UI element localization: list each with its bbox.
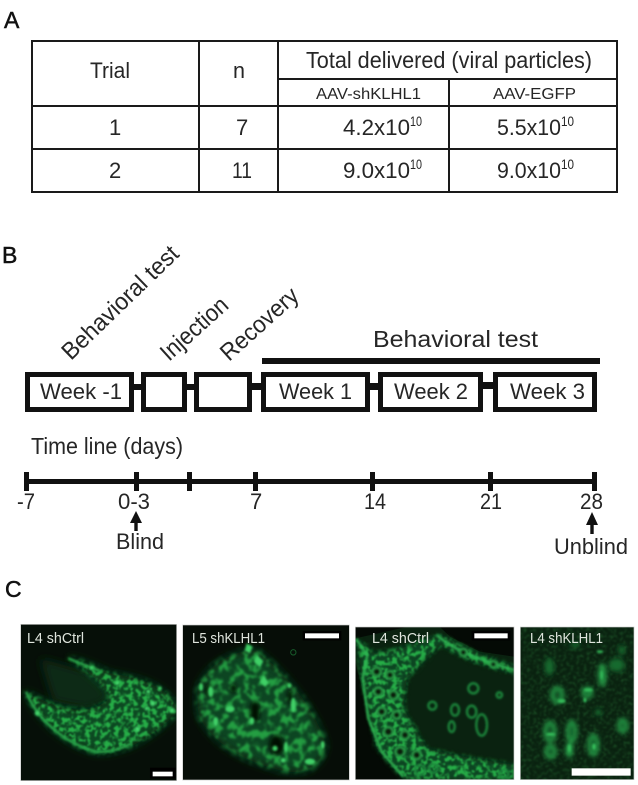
bright outer edge: [356, 635, 514, 777]
stained tissue texture: [197, 650, 325, 772]
week labels: Week 2: [394, 379, 468, 404]
image label: L4 shCtrl: L4 shCtrl: [372, 630, 429, 647]
week boxes: [28, 374, 594, 410]
timeline: [17, 433, 628, 559]
panel label B: B: [2, 242, 17, 268]
image label: L4 shCtrl: L4 shCtrl: [27, 630, 84, 647]
timeline title: Time line (days): [31, 433, 183, 459]
behavioral test span bar: [262, 358, 600, 364]
faint wedge glow: [40, 658, 110, 708]
table header: n: n: [233, 58, 245, 83]
background texture: [520, 627, 634, 780]
timeline day labels: 14: [364, 489, 386, 514]
interior cell rings: [415, 683, 508, 778]
table row: trial 2: 10: [561, 156, 574, 172]
micrograph: L4 shCtrl, low magnification: [21, 624, 177, 781]
timeline day labels: 21: [480, 489, 502, 514]
table grid: [32, 41, 617, 192]
unblind label: Unblind: [554, 534, 628, 559]
micrograph: L4 shKLHL1: [520, 627, 634, 780]
band cell rings: [372, 649, 497, 759]
bright cell rings: [545, 665, 627, 758]
table row: trial 2: 9.0x10: [343, 158, 410, 183]
week labels: Week 3: [510, 379, 585, 404]
bright edge: [26, 658, 132, 752]
image label: L4 shKLHL1: L4 shKLHL1: [530, 630, 603, 647]
bright highlights: [546, 650, 603, 752]
table header: Trial: Trial: [90, 58, 130, 83]
table row: trial 1: 1: [109, 115, 121, 140]
timeline day labels: [17, 489, 603, 514]
scale bar: [303, 631, 341, 640]
arrow: blind: [130, 511, 142, 531]
stained cell texture: [357, 635, 514, 780]
stained tissue glow: [197, 650, 325, 772]
table header: AAV-shKLHL1: AAV-shKLHL1: [316, 86, 421, 103]
dim cell clusters: [545, 642, 625, 715]
micrograph: L5 shKLHL1: [183, 625, 349, 780]
panel label C: C: [5, 576, 22, 602]
bright cells: [35, 666, 175, 732]
rotated label: recovery: Recovery: [215, 282, 304, 366]
table row: trial 2: 2: [109, 158, 121, 183]
rotated label: injection: Injection: [155, 292, 234, 366]
bright cells: [199, 643, 325, 765]
rotated label: behavioral test: Behavioral test: [56, 240, 185, 365]
table row: trial 1: [109, 113, 574, 140]
table header: AAV-EGFP: AAV-EGFP: [493, 86, 576, 103]
table row: trial 1: 7: [236, 115, 248, 140]
timeline day labels: 7: [250, 489, 262, 514]
blind label: Blind: [116, 529, 164, 554]
scale bar: [150, 768, 176, 779]
study schedule diagram: [28, 240, 600, 410]
panel label A: A: [4, 7, 20, 33]
week labels: Week 1: [279, 379, 352, 404]
micrograph: L4 shCtrl, ganglion edge: [355, 627, 514, 780]
stained tissue texture: [24, 657, 177, 753]
timeline axis and ticks: [24, 472, 597, 491]
image label: L5 shKLHL1: L5 shKLHL1: [192, 630, 265, 647]
table: delivered viral particles: [32, 41, 617, 192]
table header: total delivered: Total delivered (viral particles): [306, 47, 592, 73]
table row: trial 1: 5.5x10: [497, 115, 561, 140]
week labels: [40, 379, 585, 404]
timeline day labels: -7: [17, 489, 35, 514]
arrow: unblind: [586, 512, 598, 534]
table row: trial 1: 4.2x10: [343, 115, 410, 140]
table row: trial 2: 11: [232, 158, 252, 183]
dark corners: [355, 627, 514, 780]
week labels: Week -1: [40, 379, 122, 404]
scale bar: [472, 631, 510, 640]
scale bar: [572, 768, 631, 776]
table row: trial 1: 10: [410, 113, 422, 129]
timeline day labels: 0-3: [118, 489, 150, 514]
stained tissue glow: [24, 657, 177, 753]
stained cell band glow: [357, 635, 514, 780]
timeline day labels: 28: [580, 489, 603, 514]
table row: trial 2: [109, 156, 574, 183]
week connectors: [134, 382, 493, 390]
table row: trial 2: 9.0x10: [497, 158, 561, 183]
dark voids: [205, 683, 293, 755]
heading: behavioral test: Behavioral test: [373, 326, 539, 352]
table row: trial 2: 10: [410, 156, 422, 172]
table row: trial 1: 10: [561, 113, 574, 129]
